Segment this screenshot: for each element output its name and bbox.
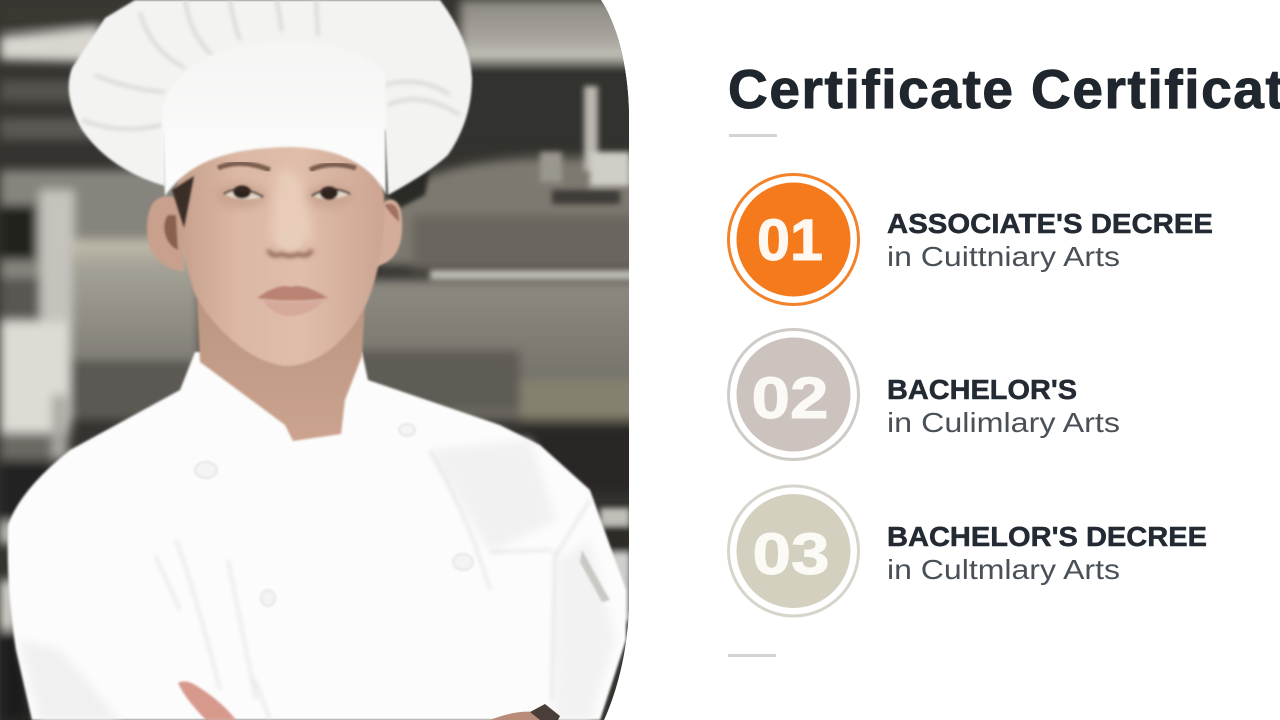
chef hat <box>69 0 472 196</box>
label 03: in Cultmlary Arts <box>887 554 1120 585</box>
item 03: bachelor's degree <box>728 486 1207 616</box>
bottom divider <box>728 654 776 657</box>
item 01: associate's degree <box>728 174 1213 304</box>
label 02 <box>887 374 1120 438</box>
badge 02: 02 <box>752 366 828 431</box>
neck <box>197 300 365 441</box>
kitchen background <box>0 0 640 720</box>
hand and wrist <box>178 681 560 720</box>
title <box>728 58 1280 120</box>
label 01: in Cuittniary Arts <box>887 241 1120 272</box>
coat shading <box>20 440 615 720</box>
badge 03 <box>728 486 858 616</box>
panel: photo of chef in kitchen <box>0 0 640 720</box>
mouth <box>257 286 328 316</box>
item 02: bachelor's <box>728 330 1120 460</box>
eyes <box>224 186 350 200</box>
label 02: in Culimlary Arts <box>887 407 1120 438</box>
chef coat <box>8 352 626 720</box>
label 02: BACHELOR'S <box>887 374 1077 405</box>
brows <box>218 163 270 170</box>
label 03: BACHELOR'S DECREE <box>887 521 1207 552</box>
nose <box>268 230 312 256</box>
label 01 <box>887 208 1213 272</box>
badge 01: 01 <box>757 208 823 273</box>
title: Certificate <box>728 58 1013 120</box>
label 03 <box>887 521 1207 585</box>
top divider <box>729 134 777 137</box>
label 01: ASSOCIATE'S DECREE <box>887 208 1213 239</box>
buttons <box>195 424 473 606</box>
face <box>172 127 384 366</box>
badge 02 <box>728 330 858 460</box>
ears <box>147 196 402 272</box>
badge 01 <box>728 174 858 304</box>
badge 03: 03 <box>752 522 830 587</box>
